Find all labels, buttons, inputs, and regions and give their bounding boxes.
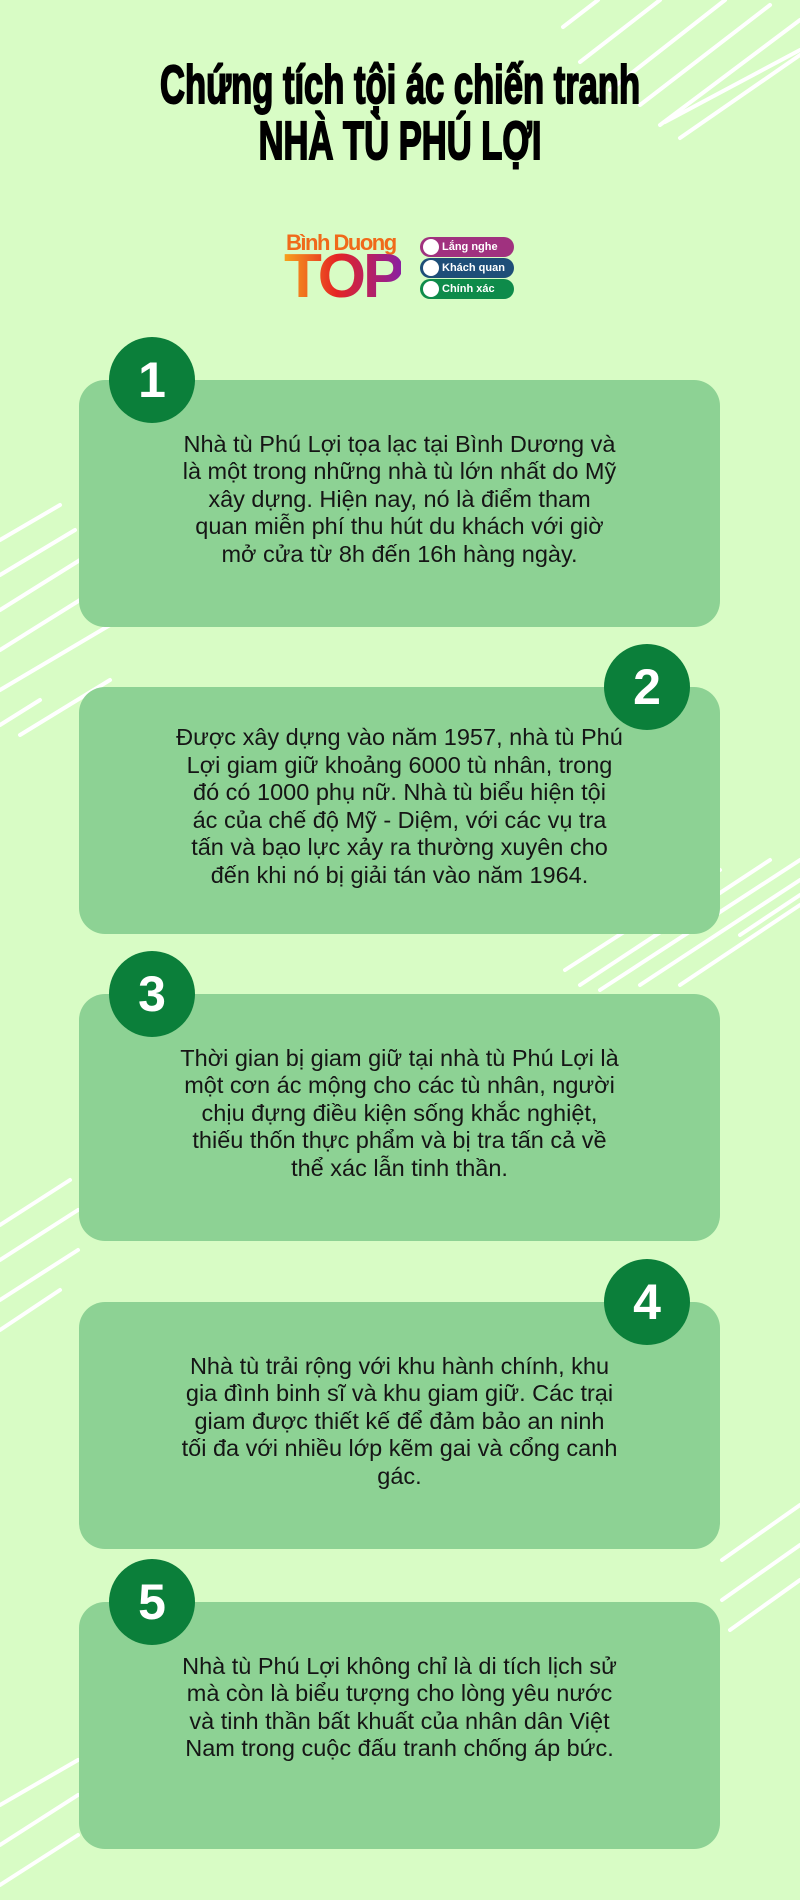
panel 5: mà còn là biểu tượng cho lòng yêu nước [187, 1680, 612, 1706]
logo: TOP [284, 242, 401, 311]
number 3 [109, 951, 195, 1037]
panel 3: một cơn ác mộng cho các tù nhân, người [184, 1072, 615, 1098]
number 5 [109, 1559, 195, 1645]
number 4 [604, 1259, 690, 1345]
panel 2: ác của chế độ Mỹ - Diệm, với các vụ tra [193, 806, 606, 832]
title [160, 55, 640, 171]
panel 2: Lợi giam giữ khoảng 6000 tù nhân, trong [187, 752, 612, 778]
panel 3: thiếu thốn thực phẩm và bị tra tấn cả về [192, 1127, 607, 1153]
title: Chứng tích tội ác chiến tranh [160, 55, 640, 115]
logo: Bình Duong [286, 230, 396, 255]
panel 1: Nhà tù Phú Lợi tọa lạc tại Bình Dương và [184, 431, 615, 457]
panel 3 [79, 994, 720, 1241]
number 2 [604, 644, 690, 730]
panel 4: gác. [377, 1463, 422, 1489]
number 1 [109, 337, 195, 423]
number 1: 1 [138, 352, 166, 408]
panel 4 [79, 1302, 720, 1549]
logo [284, 230, 514, 311]
number 5: 5 [138, 1574, 166, 1630]
panel 4: tối đa với nhiều lớp kẽm gai và cổng canh [182, 1435, 617, 1461]
panel 4: Nhà tù trải rộng với khu hành chính, khu [190, 1353, 609, 1379]
panel 4: giam được thiết kế để đảm bảo an ninh [194, 1408, 604, 1434]
panel 4: gia đình binh sĩ và khu giam giữ. Các trại [186, 1380, 613, 1406]
panel 1 [79, 380, 720, 627]
panel 3: Thời gian bị giam giữ tại nhà tù Phú Lợi là [180, 1045, 619, 1071]
panel 5: và tinh thần bất khuất của nhân dân Việt [189, 1708, 610, 1734]
title: NHÀ TÙ PHÚ LỢI [259, 111, 541, 171]
panel 1: quan miễn phí thu hút du khách với giờ [195, 513, 604, 539]
panel 5: Nhà tù Phú Lợi không chỉ là di tích lịch sử [182, 1652, 617, 1678]
number 3: 3 [138, 966, 166, 1022]
panel 2: đến khi nó bị giải tán vào năm 1964. [211, 862, 588, 888]
panel 2 [79, 687, 720, 934]
logo: Lắng nghe [442, 241, 498, 253]
panel 1: mở cửa từ 8h đến 16h hàng ngày. [221, 541, 578, 567]
panel 2: tấn và bạo lực xảy ra thường xuyên cho [191, 834, 608, 860]
panel 1: xây dựng. Hiện nay, nó là điểm tham [208, 486, 591, 512]
number 4: 4 [633, 1274, 661, 1330]
logo: Khách quan [442, 262, 505, 274]
panel 2: đó có 1000 phụ nữ. Nhà tù biểu hiện tội [193, 779, 606, 805]
panel 1: là một trong những nhà tù lớn nhất do Mỹ [183, 458, 616, 484]
panel 5 [79, 1602, 720, 1849]
panel 3: thể xác lẫn tinh thần. [291, 1155, 508, 1181]
logo: Chính xác [442, 283, 495, 295]
panel 3: chịu đựng điều kiện sống khắc nghiệt, [202, 1100, 597, 1126]
number 2: 2 [633, 659, 661, 715]
panel 2: Được xây dựng vào năm 1957, nhà tù Phú [176, 724, 623, 750]
panel 5: Nam trong cuộc đấu tranh chống áp bức. [185, 1735, 614, 1761]
